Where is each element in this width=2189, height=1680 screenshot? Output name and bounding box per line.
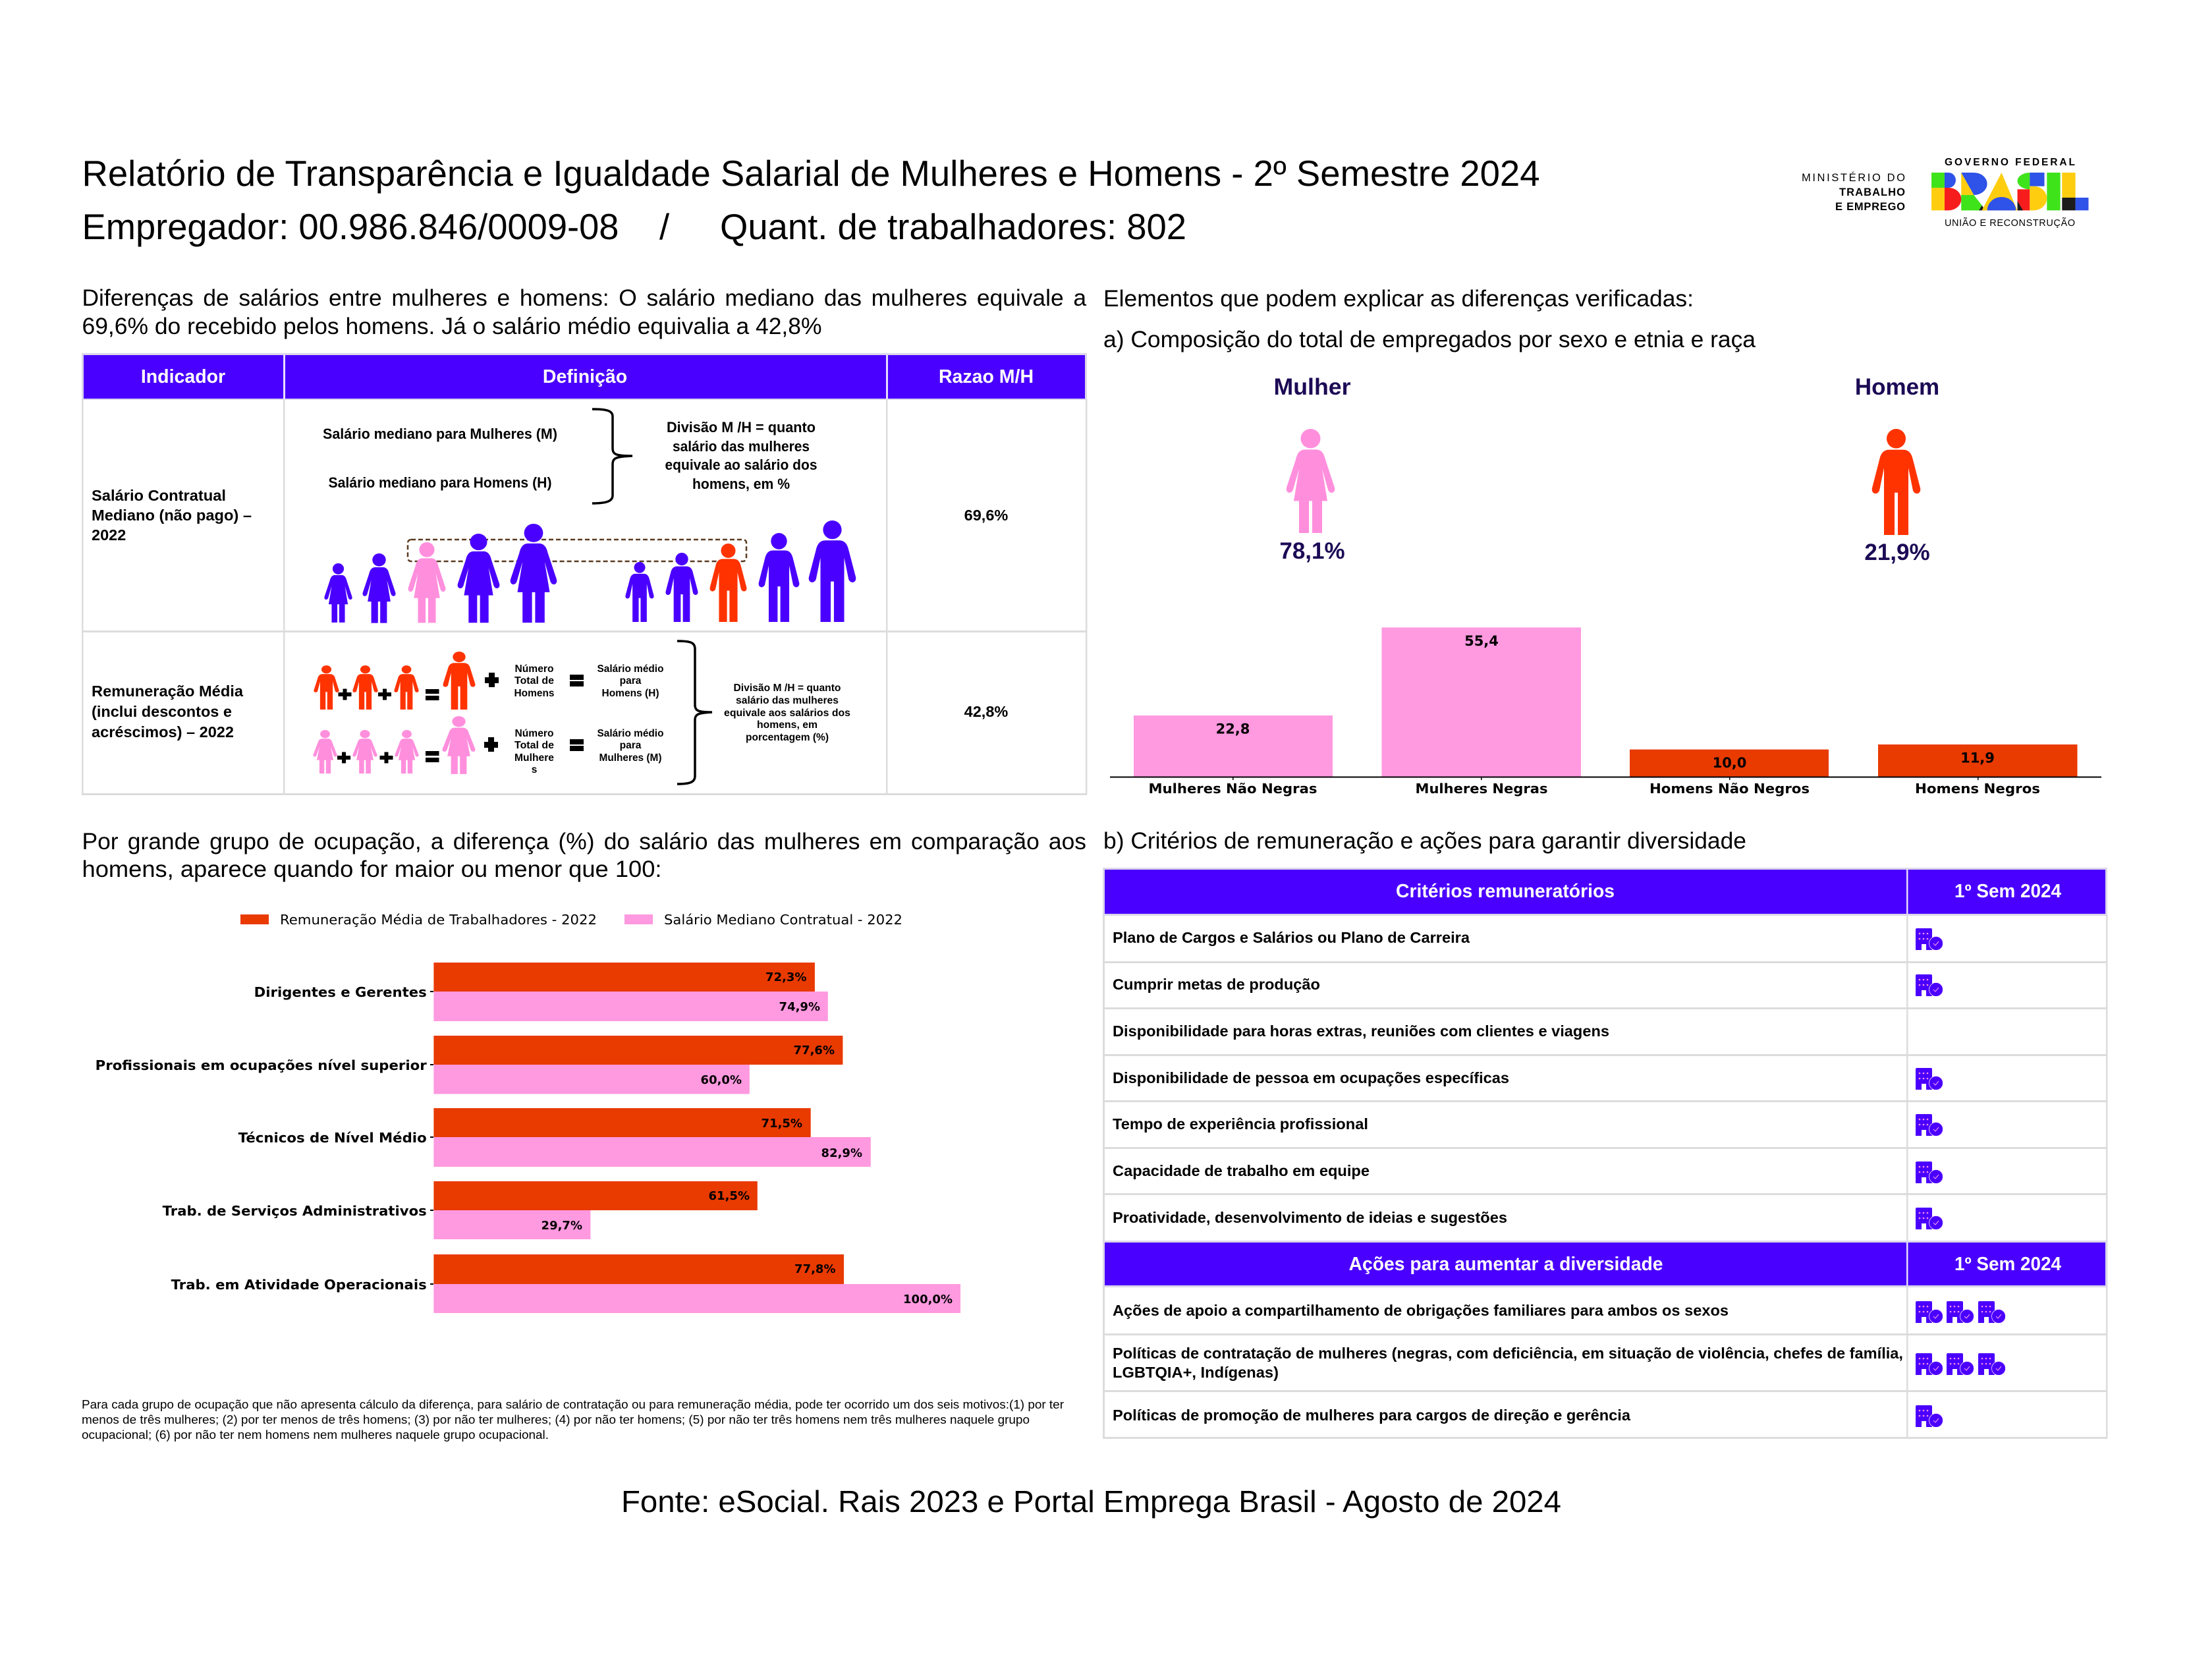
table header: Razao M/H xyxy=(939,366,1034,387)
panel: criteria table xyxy=(1103,868,2108,1439)
panel: man share: Homem xyxy=(1855,374,1939,400)
panel: woman share: 78,1% xyxy=(1279,538,1345,564)
logo: ministério do trabalho e governo federal: GOVERNO FEDERAL xyxy=(1945,157,2075,168)
right column headings xyxy=(1103,285,1756,352)
legend: Salário Mediano Contratual - 2022 xyxy=(664,912,902,928)
title xyxy=(82,154,1540,247)
row label: remuneração média: acréscimos) – 2022 xyxy=(92,723,234,741)
bar chart: composition by sex and race xyxy=(1110,627,2101,797)
definition: median salary: homens, em % xyxy=(692,476,790,492)
source note: Fonte: eSocial. Rais 2023 e Portal Emprega Brasil - Agosto de 2024 xyxy=(621,1484,1561,1519)
definition: women's average xyxy=(313,716,664,775)
panel: woman share xyxy=(1274,374,1351,564)
panel: indicator table xyxy=(82,353,1087,795)
title: Quant. de trabalhadores: 802 xyxy=(720,207,1186,247)
logo: ministério do trabalho e governo federal: E EMPREGO xyxy=(1835,201,1905,213)
criteria rows: Disponibilidade para horas extras, reuniões com clientes e viagens xyxy=(1113,1022,1609,1040)
legend xyxy=(240,912,902,928)
logo: ministério do trabalho e governo federal: TRABALHO xyxy=(1839,186,1905,198)
definition: men's average: Total de xyxy=(514,675,554,686)
group: serviços administrativos xyxy=(163,1181,758,1239)
group: profissionais: 60,0% xyxy=(701,1073,742,1087)
footnote: ocupacional; (6) por não ter nem homens nem mulheres naquele grupo ocupacional. xyxy=(82,1428,549,1442)
criteria rows: Tempo de experiência profissional xyxy=(1113,1115,1368,1133)
group: dirigentes e gerentes: 74,9% xyxy=(779,1000,820,1014)
diversity rows xyxy=(1113,1302,1903,1424)
right column headings: a) Composição do total de empregados por sexo e etnia e raça xyxy=(1103,326,1756,352)
definition: men's average: Homens (H) xyxy=(602,688,659,699)
definition: women's average: Mulheres (M) xyxy=(599,752,661,764)
group: atividade operacionais: 100,0% xyxy=(903,1293,953,1306)
definition: women's average: Mulhere xyxy=(514,752,554,764)
group: dirigentes e gerentes xyxy=(254,963,828,1021)
group: técnicos: 71,5% xyxy=(762,1117,802,1131)
table header: Definição xyxy=(543,366,627,387)
definition: median salary: Salário mediano para Mulheres (M) xyxy=(323,426,557,442)
bar chart: composition by sex and race: Homens Negros xyxy=(1915,781,2040,797)
value 42,8%: 42,8% xyxy=(964,703,1008,720)
definition: median salary: equivale ao salário dos xyxy=(665,457,817,473)
occupation text second line: homens, aparece quando for maior ou menor que 100: xyxy=(82,856,661,882)
header: ações para diversidade: 1º Sem 2024 xyxy=(1954,1254,2061,1275)
header: ações para diversidade xyxy=(1103,1241,2107,1287)
criteria rows: Capacidade de trabalho em equipe xyxy=(1113,1162,1370,1179)
table header xyxy=(82,353,1087,400)
definition: median salary: Salário mediano para Homens (H) xyxy=(328,474,552,491)
bar chart: composition by sex and race: Homens Não Negros xyxy=(1649,781,1810,797)
row label: remuneração média: (inclui descontos e xyxy=(92,703,232,720)
group: técnicos: Técnicos de Nível Médio xyxy=(238,1130,427,1146)
header: critérios remuneratórios xyxy=(1103,868,2107,916)
bar chart: composition by sex and race: 10,0 xyxy=(1713,755,1746,771)
legend: Remuneração Média de Trabalhadores - 2022 xyxy=(280,912,597,928)
group: profissionais xyxy=(96,1036,843,1094)
footnote xyxy=(82,1397,1064,1442)
group: serviços administrativos: Trab. de Serviços Administrativos xyxy=(163,1203,427,1219)
definition: median salary: salário das mulheres xyxy=(673,438,810,455)
logo: ministério do trabalho e governo federal: MINISTÉRIO DO xyxy=(1802,171,1905,184)
brace and division text: homens, em xyxy=(757,719,817,731)
header: critérios remuneratórios: Critérios remuneratórios xyxy=(1396,881,1615,902)
definition: median salary: Divisão M /H = quanto xyxy=(667,419,816,435)
title: / xyxy=(659,207,670,247)
row label: salário contratual: Salário Contratual xyxy=(92,487,226,504)
group: serviços administrativos: 61,5% xyxy=(709,1189,750,1203)
diversity rows: Políticas de contratação de mulheres (negras, com deficiência, em situação de violência, chefes de família, xyxy=(1113,1345,1903,1362)
brace and division text: equivale aos salários dos xyxy=(724,708,850,719)
icons: criteria checks xyxy=(1916,928,1943,1229)
bar chart: occupation groups xyxy=(96,963,960,1313)
group: técnicos xyxy=(238,1108,871,1167)
footnote: menos de três mulheres; (2) por ter menos de três homens; (3) por não ter mulheres; (4) por não ter homens; (5) por não ter três homens nem três mulheres naquele grupo xyxy=(82,1413,1030,1426)
definition: median salary xyxy=(323,409,817,503)
bar chart: composition by sex and race: Mulheres Negras xyxy=(1415,781,1548,797)
diversity rows: Políticas de promoção de mulheres para cargos de direção e gerência xyxy=(1113,1407,1631,1424)
intro first line: justified: Diferenças de salários entre mulheres e homens: O salário mediano das mulheres equivale a xyxy=(82,285,1086,311)
occupation text first line: justified: Por grande grupo de ocupação, a diferença (%) do salário das mulheres em comparação aos xyxy=(82,828,1086,854)
title: Empregador: 00.986.846/0009-08 xyxy=(82,207,619,247)
brace and division text: Divisão M /H = quanto xyxy=(734,683,841,694)
definition: women's average: para xyxy=(620,740,642,751)
row label: salário contratual: Mediano (não pago) – xyxy=(92,507,252,524)
logo: ministério do trabalho e governo federal: UNIÃO E RECONSTRUÇÃO xyxy=(1945,217,2075,229)
header: critérios remuneratórios: 1º Sem 2024 xyxy=(1954,881,2061,902)
group: serviços administrativos: 29,7% xyxy=(541,1219,582,1233)
definition: men's average: Homens xyxy=(514,688,555,699)
definition: women's average: Salário médio xyxy=(597,728,664,739)
definition: men's average: Salário médio xyxy=(597,663,664,675)
heading b: b) Critérios de remuneração e ações para garantir diversidade xyxy=(1103,827,1746,854)
panel: woman share: Mulher xyxy=(1274,374,1351,400)
row label: remuneração média xyxy=(92,683,244,741)
group: atividade operacionais xyxy=(171,1254,960,1313)
row label: salário contratual xyxy=(92,487,252,544)
bar chart: composition by sex and race: 11,9 xyxy=(1960,750,1995,766)
logo: ministério do trabalho e governo federal xyxy=(1802,157,2088,229)
diversity rows: Ações de apoio a compartilhamento de obrigações familiares para ambos os sexos xyxy=(1113,1302,1729,1319)
group: técnicos: 82,9% xyxy=(821,1146,862,1160)
criteria rows: Plano de Cargos e Salários ou Plano de Carreira xyxy=(1113,929,1470,946)
definition: men's average xyxy=(314,652,664,710)
people: median illustration xyxy=(324,520,856,623)
right column headings: Elementos que podem explicar as diferenças verificadas: xyxy=(1103,285,1694,312)
panel: man share: 21,9% xyxy=(1864,540,1930,565)
group: atividade operacionais: 77,8% xyxy=(794,1262,835,1276)
bar chart: composition by sex and race: 22,8 xyxy=(1216,721,1250,737)
header: ações para diversidade: Ações para aumentar a diversidade xyxy=(1349,1254,1663,1275)
icons: diversity checks xyxy=(1916,1301,2005,1427)
bar chart: composition by sex and race: Mulheres Não Negras xyxy=(1149,781,1317,797)
value 69,6%: 69,6% xyxy=(964,507,1008,524)
group: profissionais: Profissionais em ocupações nível superior xyxy=(96,1057,427,1073)
brace and division text xyxy=(677,641,850,784)
intro second line: salary difference: 69,6% do recebido pelos homens. Já o salário médio equivalia a 42,8% xyxy=(82,313,822,339)
definition: women's average: Total de xyxy=(514,740,554,751)
criteria rows: Proatividade, desenvolvimento de ideias e sugestões xyxy=(1113,1209,1507,1226)
title: Relatório de Transparência e Igualdade Salarial de Mulheres e Homens - 2º Semestre 2024 xyxy=(82,154,1540,194)
criteria rows: Disponibilidade de pessoa em ocupações específicas xyxy=(1113,1069,1509,1086)
group: profissionais: 77,6% xyxy=(794,1044,835,1057)
bar chart: composition by sex and race: 55,4 xyxy=(1464,633,1499,649)
definition: women's average: s xyxy=(532,764,537,775)
criteria rows: Cumprir metas de produção xyxy=(1113,976,1320,993)
criteria rows xyxy=(1113,929,1609,1226)
brace and division text: porcentagem (%) xyxy=(746,732,829,743)
group: dirigentes e gerentes: Dirigentes e Gerentes xyxy=(254,984,427,1000)
row label: salário contratual: 2022 xyxy=(92,526,126,544)
group: atividade operacionais: Trab. em Atividade Operacionais xyxy=(171,1277,427,1293)
row label: remuneração média: Remuneração Média xyxy=(92,683,244,700)
diversity rows: LGBTQIA+, Indígenas) xyxy=(1113,1364,1279,1381)
definition: men's average: para xyxy=(620,675,642,686)
group: dirigentes e gerentes: 72,3% xyxy=(765,970,806,984)
brace and division text: salário das mulheres xyxy=(736,695,839,706)
definition: men's average: Número xyxy=(515,663,553,675)
panel: man share xyxy=(1855,374,1939,565)
definition: women's average: Número xyxy=(515,728,553,739)
footnote: Para cada grupo de ocupação que não apresenta cálculo da diferença, para salário de contratação ou para remuneração média, pode ter ocorrido um dos seis motivos:(1) por ter xyxy=(82,1397,1064,1411)
table header: Indicador xyxy=(141,366,225,387)
